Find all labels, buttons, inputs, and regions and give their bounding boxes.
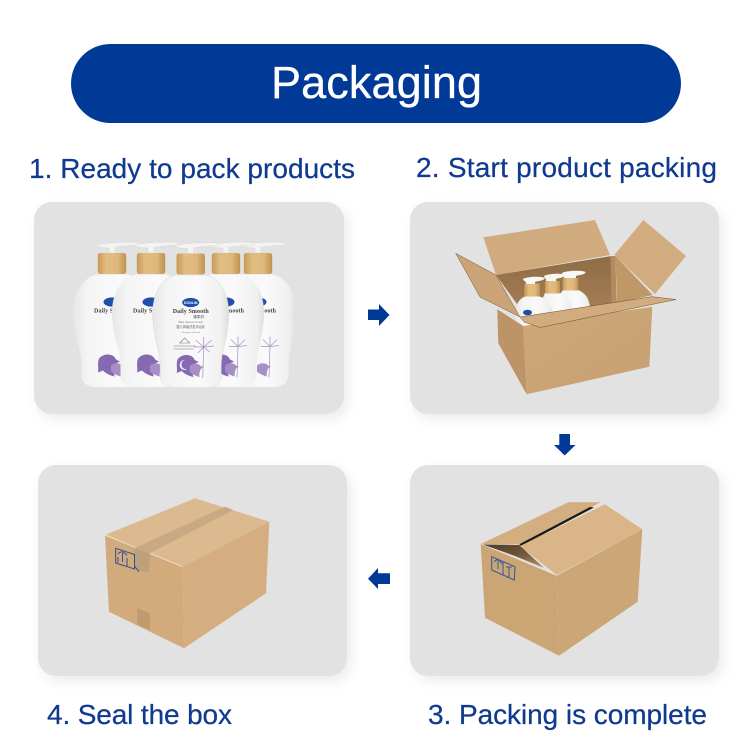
- bottle 1: [73, 242, 151, 387]
- left flap: [456, 253, 520, 317]
- bottle 3 (front): [153, 243, 229, 388]
- right flap: [614, 220, 686, 294]
- handling label: [492, 557, 515, 580]
- title banner: Packaging: [271, 57, 482, 108]
- bottle 4: Daily Smooth: [208, 308, 245, 314]
- tape: [134, 507, 233, 630]
- bottle 3 (front): 婴儿抑菌洗发沐浴乳: [176, 324, 206, 329]
- inner back wall: [496, 256, 617, 322]
- bottle 2: Daily Smooth: [133, 308, 170, 314]
- packed bottle: middle: [541, 274, 572, 325]
- heading: step 1: 1. Ready to pack products: [29, 153, 355, 184]
- back flap: [483, 220, 610, 275]
- right face: [183, 522, 269, 648]
- packed bottle: back: [556, 271, 590, 320]
- bottle 5: [220, 242, 296, 387]
- bottle 3 (front): DCNLIN: [184, 301, 198, 305]
- right face: [557, 529, 642, 656]
- title banner: [71, 44, 681, 123]
- arrow: right: [368, 304, 390, 326]
- flap gap: [519, 507, 594, 546]
- bottle 2: [112, 242, 190, 387]
- left face: [497, 309, 527, 394]
- heading: step 4: 4. Seal the box: [47, 699, 232, 730]
- left face: [105, 535, 184, 648]
- closed box: [481, 502, 642, 656]
- heading: step 3: 3. Packing is complete: [428, 699, 707, 730]
- arrow: down: [554, 434, 576, 456]
- bottle 3 (front): Shampoo and bath: [181, 331, 201, 334]
- arrow: left: [368, 568, 390, 589]
- bottle 1: Daily Smooth: [94, 308, 131, 314]
- left flap top: [481, 502, 601, 544]
- panel: seal the box: [38, 465, 347, 676]
- front flap: [520, 297, 676, 328]
- inner right wall: [616, 256, 653, 303]
- bottle 4: [188, 242, 264, 387]
- panel: packing is complete: [410, 465, 719, 676]
- bottle 5: Daily Smooth: [240, 308, 277, 314]
- packed bottle: front: [516, 277, 552, 328]
- handling label: [116, 548, 139, 572]
- inner corner post: [610, 256, 616, 304]
- heading: step 2: 2. Start product packing: [416, 152, 717, 183]
- top face: [105, 498, 269, 567]
- bottle 3 (front): Daily Smooth: [173, 309, 209, 315]
- left face: [481, 544, 559, 656]
- bottle 3 (front): 臻柔舒: [193, 314, 204, 319]
- front face: [523, 307, 652, 394]
- panel: start product packing: [410, 202, 719, 414]
- bottle 3 (front): Baby shampoo & body: [179, 321, 204, 324]
- right flap top: [520, 504, 642, 575]
- dark opening: [483, 544, 544, 568]
- panel: ready to pack products: [34, 202, 344, 414]
- sealed box: [105, 498, 269, 648]
- open box: [456, 220, 686, 394]
- lid edge highlight: [105, 535, 183, 567]
